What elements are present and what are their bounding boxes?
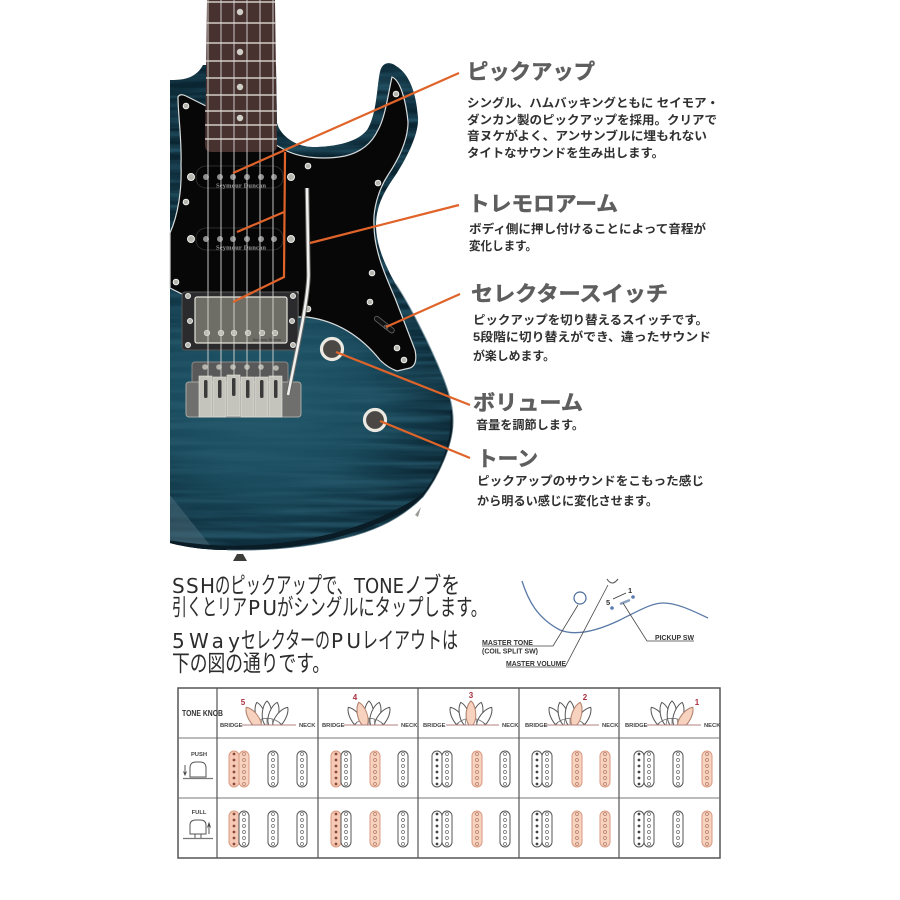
description: selector switch <box>473 312 711 363</box>
control layout diagram <box>482 579 708 668</box>
neck and fretboard <box>205 0 277 152</box>
bridge and neck labels: BRIDGE <box>322 723 345 729</box>
description: tremolo arm <box>469 221 706 253</box>
description: selector switch: 5段階に切り替えができ、違ったサウンド <box>473 329 711 344</box>
explanatory text: PU <box>248 596 277 620</box>
bridge and neck labels: NECK <box>401 723 418 729</box>
leader lines <box>482 585 694 667</box>
position numbers: 2 <box>583 693 588 702</box>
bridge and neck labels: BRIDGE <box>625 723 648 729</box>
push row pickups <box>229 751 712 787</box>
body edge hardware <box>415 507 421 517</box>
guitar photo <box>170 0 460 561</box>
switch marker: 5 <box>606 598 610 607</box>
description: pickup <box>467 95 719 160</box>
description: pickup: タイトなサウンドを生み出します。 <box>467 145 664 160</box>
description: tone: ピックアップのサウンドをこもった感じ <box>477 473 704 488</box>
label: master tone: MASTER TONE <box>482 638 533 647</box>
heading: tremolo arm: トレモロアーム <box>468 193 618 216</box>
leader: pickup <box>233 73 459 302</box>
bridge and neck labels: BRIDGE <box>423 723 446 729</box>
bridge humbucker <box>182 292 298 350</box>
neck pickup <box>196 166 283 190</box>
bridge and neck labels: NECK <box>704 723 721 729</box>
position numbers <box>241 691 700 707</box>
description: pickup: 音ヌケがよく、アンサンブルに埋もれない <box>467 128 707 143</box>
explanatory text: SSH <box>172 574 215 598</box>
explanatory text: セレクターの <box>241 628 330 654</box>
pickup selector table <box>178 688 721 858</box>
leader: volume <box>336 352 470 405</box>
volume knob marker <box>607 579 618 583</box>
callout: pickup <box>467 61 719 160</box>
callout: tone <box>477 448 704 508</box>
tremolo bridge <box>186 362 301 417</box>
tone knob marker <box>574 592 586 604</box>
description: tone <box>477 473 704 508</box>
middle pickup: Seymour Duncan <box>216 244 266 252</box>
bridge and neck labels: NECK <box>299 723 316 729</box>
guitar body <box>170 60 460 555</box>
row header: pull: FULL <box>192 810 207 816</box>
tone knob <box>364 410 386 430</box>
row header: pull <box>183 810 213 838</box>
explanatory text: がシングルにタップします。 <box>277 595 487 621</box>
heading: volume: ボリューム <box>473 392 583 415</box>
pull row pickups <box>229 811 712 847</box>
label: pickup switch: PICKUP SW <box>655 633 695 642</box>
switch marker <box>606 586 635 610</box>
pickguard <box>170 77 416 371</box>
position numbers: 5 <box>241 698 246 707</box>
explanatory text: 5Way <box>172 629 240 653</box>
bridge and neck labels: BRIDGE <box>220 723 243 729</box>
description: tremolo arm: ボディ側に押し付けることによって音程が <box>469 221 706 236</box>
bridge humbucker: Seymour Duncan <box>253 337 281 342</box>
callout: tremolo arm <box>468 193 706 253</box>
description: tone: から明るい感じに変化させます。 <box>477 493 658 508</box>
switch marker: 1 <box>628 586 632 595</box>
label: master volume: MASTER VOLUME <box>506 659 566 668</box>
strings <box>208 0 273 378</box>
selector switch <box>373 315 395 334</box>
row header: tone knob: TONE KNOB <box>182 709 223 718</box>
bridge and neck labels <box>220 723 721 729</box>
heading: tone: トーン <box>477 448 538 471</box>
explanatory text: 引くとリア <box>172 595 247 621</box>
label: master tone <box>482 638 538 656</box>
explanatory text: のピックアップで、 <box>215 573 352 599</box>
description: selector switch: ピックアップを切り替えるスイッチです。 <box>473 312 708 327</box>
position numbers: 3 <box>469 691 474 700</box>
table grid <box>178 688 720 858</box>
row header: push: PUSH <box>191 752 207 758</box>
header petals <box>242 700 701 726</box>
explanatory text: レイアウトは <box>362 628 458 654</box>
label: master tone: (COIL SPLIT SW) <box>482 646 538 656</box>
callout: volume <box>473 392 584 432</box>
explanatory text <box>172 573 487 677</box>
leader: tone <box>380 421 470 458</box>
bridge and neck labels: NECK <box>602 723 619 729</box>
infographic canvas <box>170 0 721 859</box>
leader: tremolo arm <box>310 205 459 243</box>
bridge and neck labels: NECK <box>502 723 519 729</box>
tremolo arm <box>288 188 308 395</box>
description: tremolo arm: 変化します。 <box>469 238 537 253</box>
heading: selector switch: セレクタースイッチ <box>471 283 668 306</box>
bridge and neck labels: BRIDGE <box>525 723 548 729</box>
row header: push <box>183 752 213 778</box>
position numbers: 4 <box>353 693 358 702</box>
neck pickup: Seymour Duncan <box>216 182 266 190</box>
explanatory text: 下の図の通りです。 <box>172 651 330 677</box>
heading: pickup: ピックアップ <box>467 61 595 84</box>
explanatory text: ノブを <box>404 573 460 599</box>
volume knob <box>322 338 342 360</box>
body outline curve <box>522 581 708 633</box>
position numbers: 1 <box>695 698 700 707</box>
description: pickup: ダンカン製のピックアップを採用。クリアで <box>467 112 717 127</box>
description: volume: 音量を調節します。 <box>476 417 584 432</box>
explanatory text: TONE <box>353 574 404 598</box>
pickguard screws <box>173 91 407 363</box>
orange leader lines <box>233 73 470 458</box>
description: pickup: シングル、ハムバッキングともに セイモア・ <box>467 95 719 110</box>
description: selector switch: が楽しめます。 <box>473 348 555 363</box>
leader: selector switch <box>386 294 460 327</box>
middle pickup <box>196 228 283 252</box>
strap button <box>233 554 247 561</box>
callout: selector switch <box>471 283 711 363</box>
explanatory text: PU <box>331 629 361 653</box>
